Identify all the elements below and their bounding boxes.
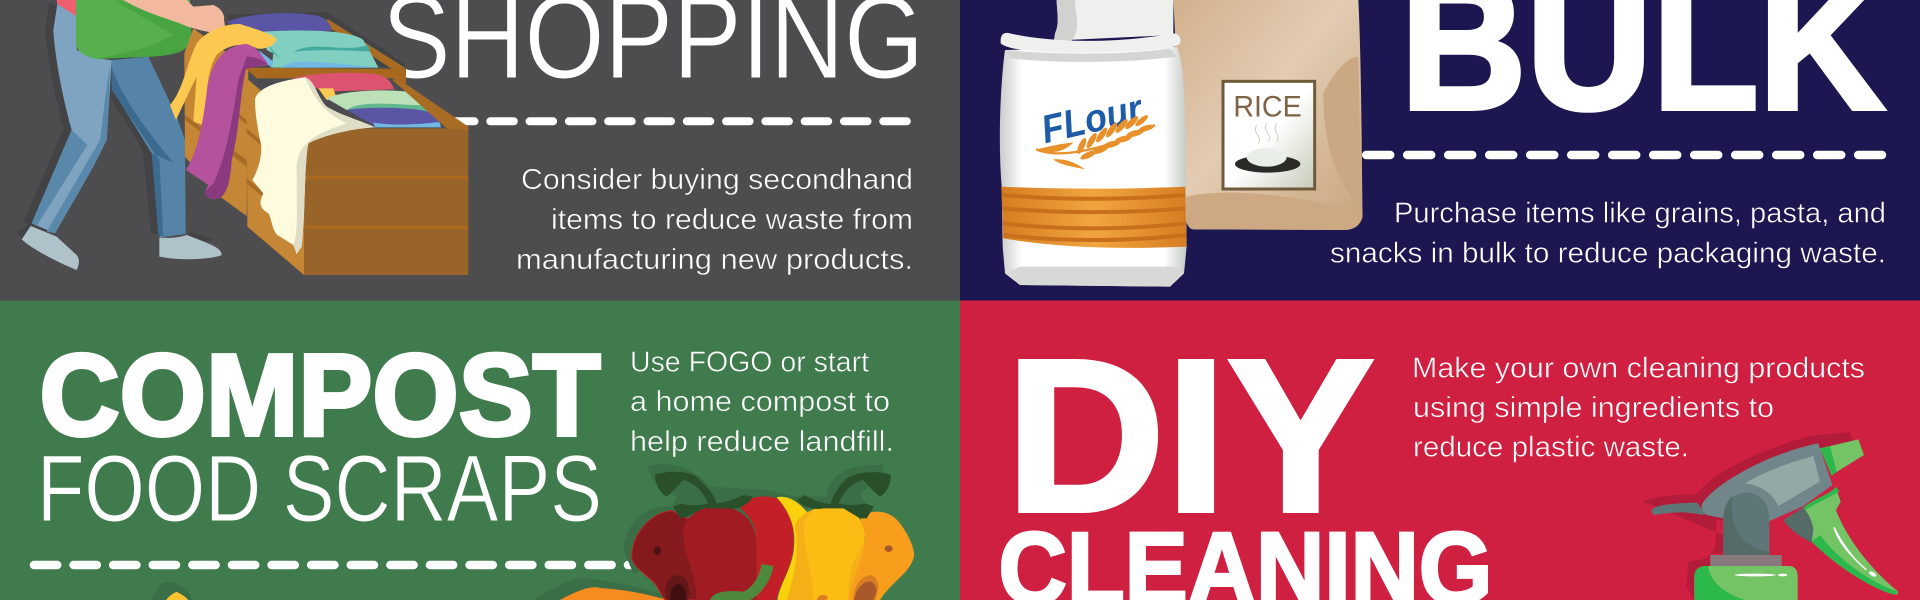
capsicum stems [655, 472, 891, 518]
back crate [184, 13, 406, 216]
person: torso and arm [57, 0, 225, 59]
rice bag: RICE [1233, 91, 1302, 124]
rice bag [1173, 0, 1363, 230]
illustration: rice and flour bags [1000, 0, 1363, 287]
text: bulk description [1330, 198, 1886, 270]
flour bag [1000, 0, 1187, 287]
illustration: lemon top [152, 582, 192, 600]
person: jeans and shoes [22, 4, 222, 270]
spray nozzle [1820, 439, 1864, 476]
spray head [1651, 443, 1832, 555]
text: bulk description: snacks in bulk to reduce packaging waste. [1330, 238, 1886, 270]
text: compost description [630, 346, 894, 458]
cloth: purple shirt [186, 44, 268, 199]
front crate [247, 73, 468, 275]
illustration: carrot [533, 578, 672, 600]
heading: DIY: DIY [1006, 315, 1374, 558]
spray trigger [1783, 487, 1899, 595]
panel: compost food scraps [0, 300, 960, 600]
panel: buy in bulk [960, 0, 1920, 301]
text: cleaning description: reduce plastic waste. [1413, 432, 1689, 464]
yellow capsicum [777, 497, 865, 600]
illustration: spray bottle [1643, 432, 1899, 600]
panel: DIY cleaning [960, 300, 1920, 600]
text: shopping description: manufacturing new products. [516, 244, 913, 276]
flour bag: FLour [1037, 86, 1148, 152]
bottle body [1694, 566, 1798, 600]
red capsicum [632, 496, 794, 600]
text: compost description: a home compost to [630, 386, 890, 418]
text: compost description: help reduce landfill. [630, 426, 894, 458]
panel: secondhand shopping [0, 0, 960, 301]
text: shopping description: items to reduce waste from [551, 204, 913, 236]
bottle collar [1710, 555, 1782, 567]
illustration: shopper at clothes crates [17, 0, 468, 275]
text: bulk description: Purchase items like grains, pasta, and [1394, 198, 1886, 230]
text: shopping description: Consider buying secondhand [521, 164, 913, 196]
heading: food scraps: FOOD SCRAPS [37, 436, 602, 542]
text: shopping description [516, 164, 913, 276]
cloth: yellow shirt [170, 24, 277, 125]
illustration: capsicums [623, 464, 914, 600]
text: cleaning description: Make your own cleaning products [1412, 353, 1865, 385]
text: cleaning description [1412, 353, 1865, 464]
text: compost description: Use FOGO or start [630, 346, 869, 378]
orange capsicum [817, 512, 914, 600]
vegetable stalk [710, 564, 773, 600]
cloth: cream shirt [252, 77, 375, 254]
text: cleaning description: using simple ingredients to [1413, 392, 1774, 424]
heading: compost: COMPOST [40, 330, 600, 460]
